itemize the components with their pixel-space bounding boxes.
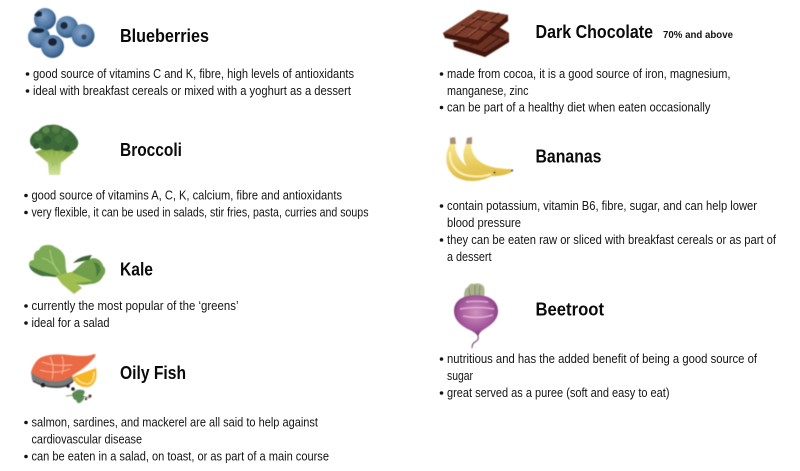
icon: kale [29,245,105,294]
icon: salmon with lemon and parsley [31,354,97,403]
text: oily fish facts: can be eaten in a salad, on toast, or as part of a main course [32,450,329,464]
text: chocolate facts [440,67,730,114]
heading: Oily Fish: Oily Fish [120,363,186,383]
panel: dark chocolate [440,10,733,114]
text: beetroot facts [440,352,757,400]
text: bananas facts: a dessert [447,250,492,264]
text: oily fish facts: cardiovascular disease [32,432,142,446]
panel: oily fish [24,354,329,464]
text: oily fish facts: salmon, sardines, and mackerel are all said to help against [32,416,318,430]
text: kale facts: currently the most popular of the ‘greens’ [32,299,238,313]
heading: Kale: Kale [120,260,153,280]
icon: beetroot [454,283,498,348]
text: bananas facts [440,199,776,264]
icon: blueberries [28,8,94,58]
heading: Bananas: Bananas [536,146,602,166]
heading: Beetroot: Beetroot [536,300,604,320]
text: chocolate facts: can be part of a healthy diet when eaten occasionally [447,100,711,114]
text: kale facts: ideal for a salad [32,316,110,330]
text: broccoli facts: good source of vitamins A, C, K, calcium, fibre and antioxidants [32,188,342,202]
text: beetroot facts: nutritious and has the added benefit of being a good source of [447,352,757,366]
heading: Broccoli: Broccoli [120,140,182,160]
panel: beetroot [440,283,757,400]
text: broccoli facts: very flexible, it can be used in salads, stir fries, pasta, curries and soups [32,206,368,220]
text: oily fish facts [24,416,329,464]
text: beetroot facts: great served as a puree (soft and easy to eat) [447,386,670,400]
panel: broccoli [24,125,368,220]
note: 70% and above: 70% and above [663,29,733,41]
text: chocolate facts: manganese, zinc [447,84,528,98]
panel: bananas [440,137,776,264]
heading: Dark Chocolate: Dark Chocolate [536,22,653,42]
text: beetroot facts: sugar [447,369,473,383]
panel: blueberries [26,8,354,98]
icon: chocolate bars [443,10,509,57]
heading: Blueberries: Blueberries [120,26,209,46]
text: kale facts [24,299,239,330]
text: blueberries facts: ideal with breakfast cereals or mixed with a yoghurt as a dessert [33,84,351,98]
text: bananas facts: contain potassium, vitamin B6, fibre, sugar, and can help lower [447,199,757,213]
text: blueberries facts [26,67,354,98]
text: chocolate facts: made from cocoa, it is a good source of iron, magnesium, [447,67,730,81]
panel: kale [24,245,239,330]
text: broccoli facts [24,188,368,220]
text: bananas facts: blood pressure [447,216,521,230]
icon: bananas [446,137,513,181]
text: blueberries facts: good source of vitamins C and K, fibre, high levels of antioxidants [33,67,354,81]
icon: broccoli [30,125,78,175]
